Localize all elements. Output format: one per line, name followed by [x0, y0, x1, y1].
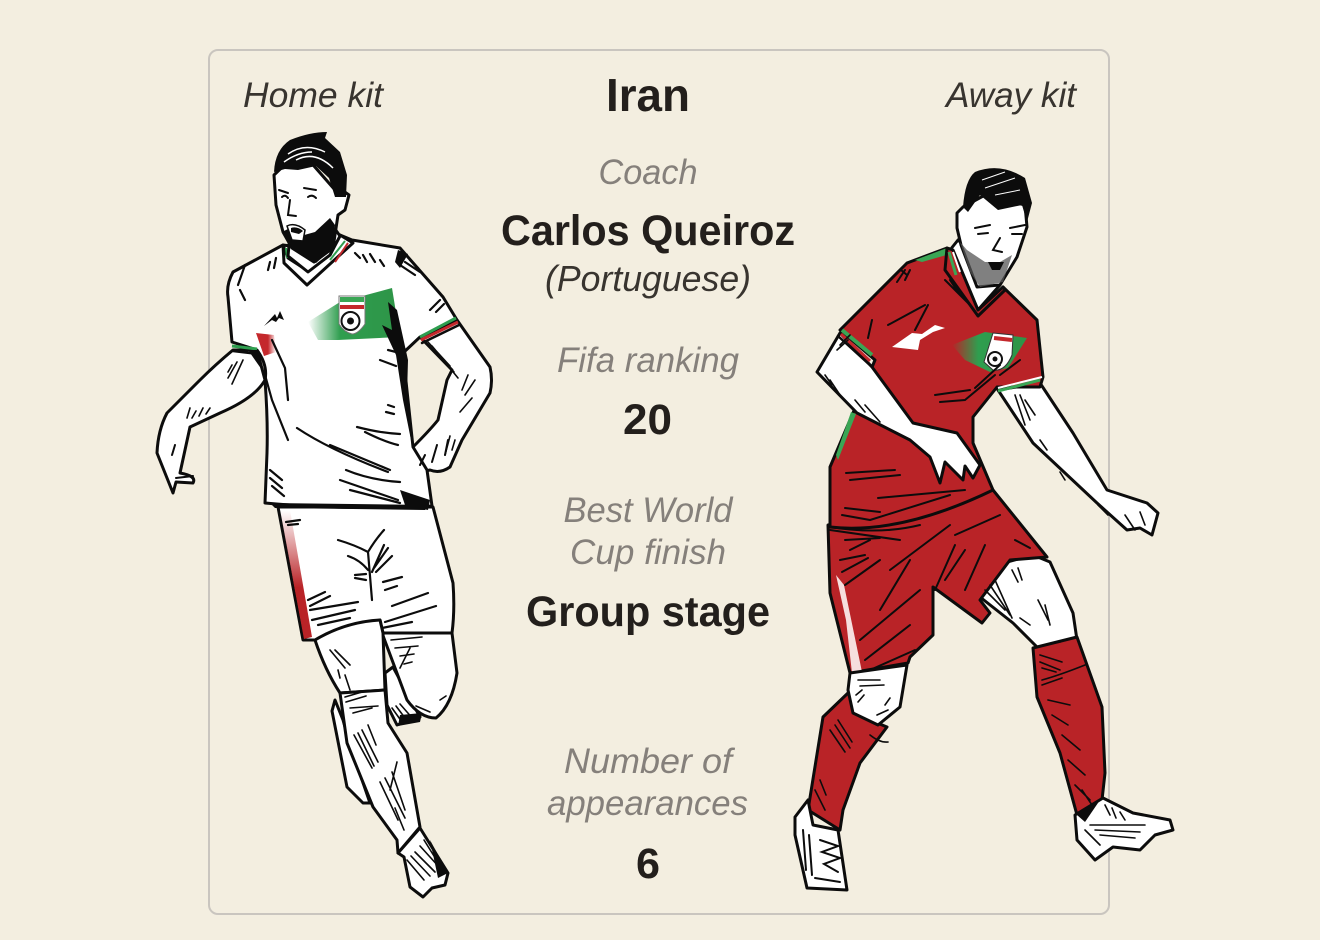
right sock [1033, 637, 1105, 815]
right arm [998, 383, 1158, 535]
illustration: away kit player [795, 168, 1173, 890]
label: number of appearances: appearances [547, 784, 748, 823]
arm hatching [187, 342, 475, 455]
shorts [828, 490, 1047, 673]
hair [963, 168, 1032, 222]
back leg and calf [382, 633, 457, 726]
hair highlights [284, 147, 333, 168]
head and face [274, 150, 349, 263]
shirt folds [830, 270, 1020, 540]
label: best world cup finish [564, 491, 734, 572]
side green piping [836, 412, 856, 460]
label: coach: Coach [598, 153, 698, 192]
label: best world cup finish: Best World [564, 491, 734, 530]
shorts folds [830, 515, 1030, 670]
illustration: home kit player [157, 132, 492, 897]
hair [274, 132, 347, 197]
collar [945, 248, 1005, 316]
neck [288, 215, 340, 272]
shorts [278, 507, 454, 640]
label: fifa ranking: Fifa ranking [557, 341, 740, 380]
hair highlights [982, 172, 1020, 195]
chest green band [952, 332, 1027, 372]
label: home kit: Home kit [243, 76, 384, 115]
shorts creases [286, 520, 436, 628]
chest green band [308, 288, 400, 340]
white kit flash [892, 325, 945, 350]
label: best world cup finish: Cup finish [570, 533, 726, 572]
kit logo mark [264, 311, 284, 326]
neck [950, 240, 1000, 310]
label: away kit: Away kit [944, 76, 1077, 115]
left boot [795, 800, 847, 890]
head and face [957, 195, 1027, 287]
shorts red stripe [280, 510, 312, 639]
shirt [830, 248, 1043, 528]
value: appearances: 6 [636, 840, 660, 888]
title: Iran: Iran [606, 69, 690, 121]
left arm [157, 350, 265, 493]
right thigh [980, 555, 1077, 650]
left arm [817, 333, 980, 483]
shirt folds and shadows [238, 250, 444, 510]
shorts white stripe [836, 575, 862, 673]
collar with stripes [283, 235, 353, 285]
left sleeve red flash [256, 333, 276, 356]
front leg and sock [315, 620, 420, 853]
left knee [848, 665, 907, 725]
shirt body [228, 235, 457, 507]
right arm [402, 320, 492, 473]
sleeve cuffs [838, 330, 1042, 391]
value: best finish: Group stage [526, 588, 770, 636]
left sock [808, 693, 887, 830]
hand details [172, 440, 448, 478]
front boot [398, 828, 448, 897]
label: number of appearances [547, 742, 748, 823]
sock and leg hatching [815, 568, 1092, 810]
value: coach nationality: (Portuguese) [545, 258, 751, 299]
sleeve cuffs [232, 318, 459, 354]
shoulder green trim [915, 248, 950, 262]
panel: card border [209, 50, 1109, 914]
value: coach name: Carlos Queiroz [501, 207, 795, 255]
back boot [332, 700, 370, 803]
crest [984, 333, 1013, 370]
federation crest [339, 296, 365, 334]
value: fifa ranking: 20 [623, 396, 672, 444]
arm hatching [825, 335, 1145, 530]
label: number of appearances: Number of [564, 742, 735, 781]
right boot [1075, 798, 1173, 860]
